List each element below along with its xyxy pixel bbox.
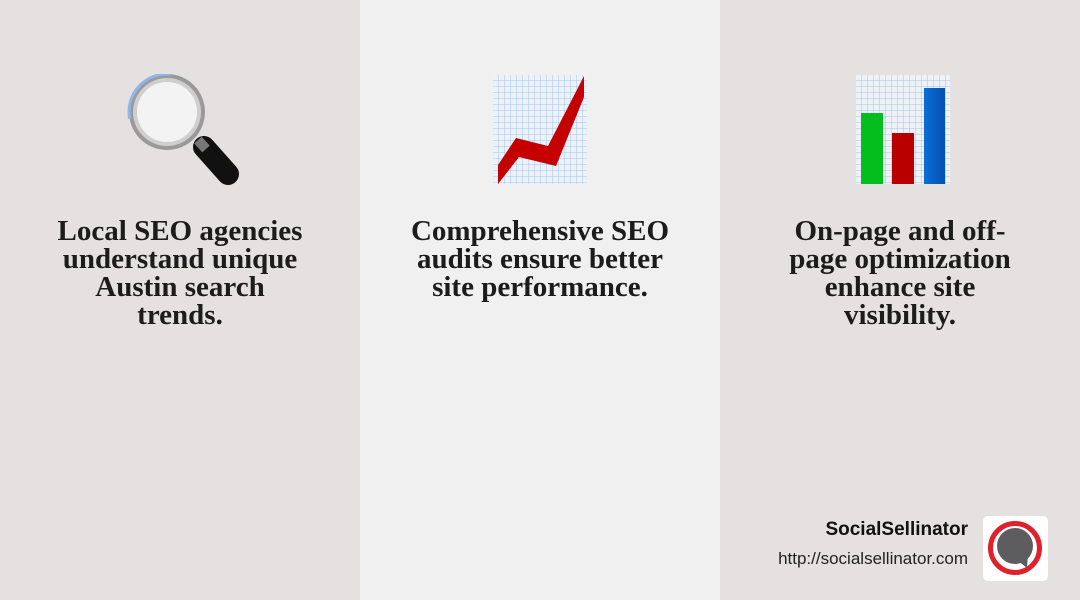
text: audits: Comprehensive SEO	[411, 215, 669, 247]
panel: optimization	[720, 0, 1080, 600]
icon: magnifying glass	[128, 74, 239, 185]
text: optimization	[789, 215, 1011, 331]
icon: line chart	[493, 75, 587, 184]
icon: bar chart	[856, 75, 950, 184]
text: optimization: enhance site	[825, 271, 975, 303]
text: local SEO: Austin search	[95, 271, 265, 303]
text: audits: site performance.	[432, 271, 648, 303]
text: audits: audits ensure better	[417, 243, 663, 275]
text: local SEO: understand unique	[63, 243, 297, 275]
text: local SEO: Local SEO agencies	[58, 215, 302, 247]
text: local SEO	[58, 215, 302, 331]
brand url: http://socialsellinator.com	[778, 549, 968, 568]
text: optimization: visibility.	[844, 299, 956, 331]
logo	[983, 516, 1048, 581]
brand block	[778, 516, 1048, 581]
text: optimization: On-page and off-	[794, 215, 1006, 247]
text: audits	[411, 215, 669, 303]
text: local SEO: trends.	[137, 299, 223, 331]
panel: audits	[360, 0, 720, 600]
brand name: SocialSellinator	[825, 519, 968, 540]
text: optimization: page optimization	[789, 243, 1011, 275]
panel: local SEO	[0, 0, 360, 600]
